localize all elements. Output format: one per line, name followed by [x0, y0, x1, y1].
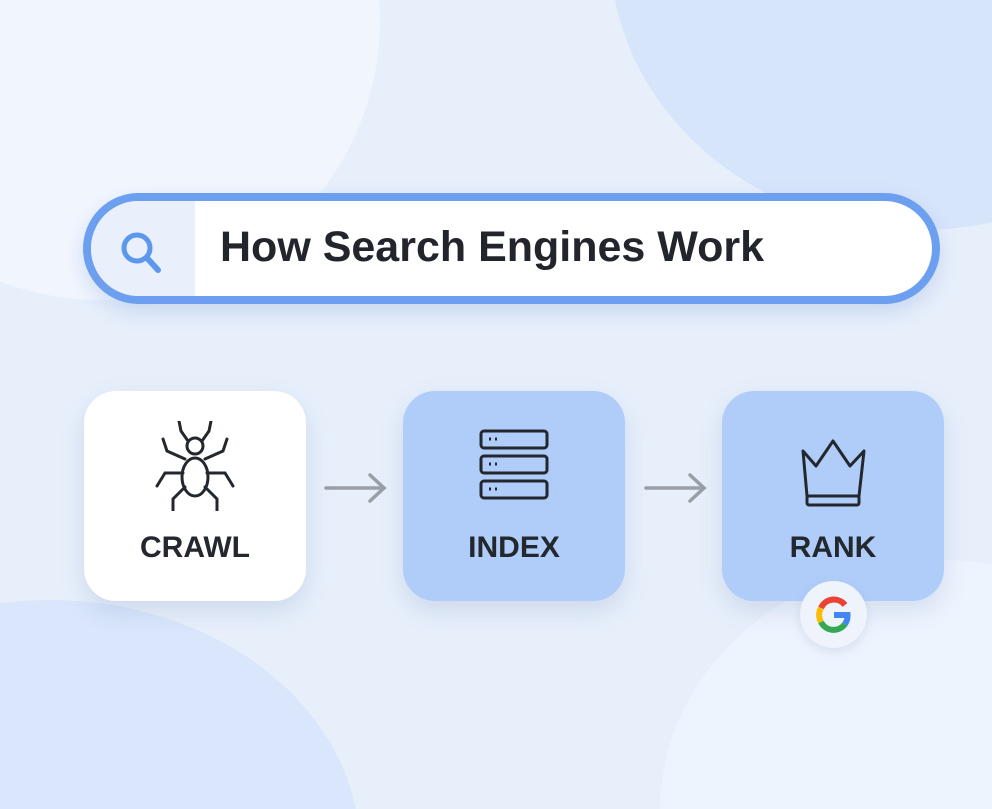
arrow — [644, 473, 706, 503]
icon: crown — [802, 439, 866, 506]
card: index — [403, 391, 625, 601]
search bar — [83, 193, 940, 304]
title: How Search Engines Work — [220, 223, 764, 271]
label: RANK — [790, 531, 876, 564]
card: crawl — [84, 391, 306, 601]
icon: magnifier — [91, 201, 195, 296]
card: rank — [722, 391, 944, 601]
icon: spider — [155, 421, 235, 511]
label: INDEX — [468, 531, 560, 564]
arrow — [324, 473, 386, 503]
icon: google badge — [800, 581, 867, 648]
icon: server — [480, 430, 548, 500]
label: CRAWL — [140, 531, 250, 564]
